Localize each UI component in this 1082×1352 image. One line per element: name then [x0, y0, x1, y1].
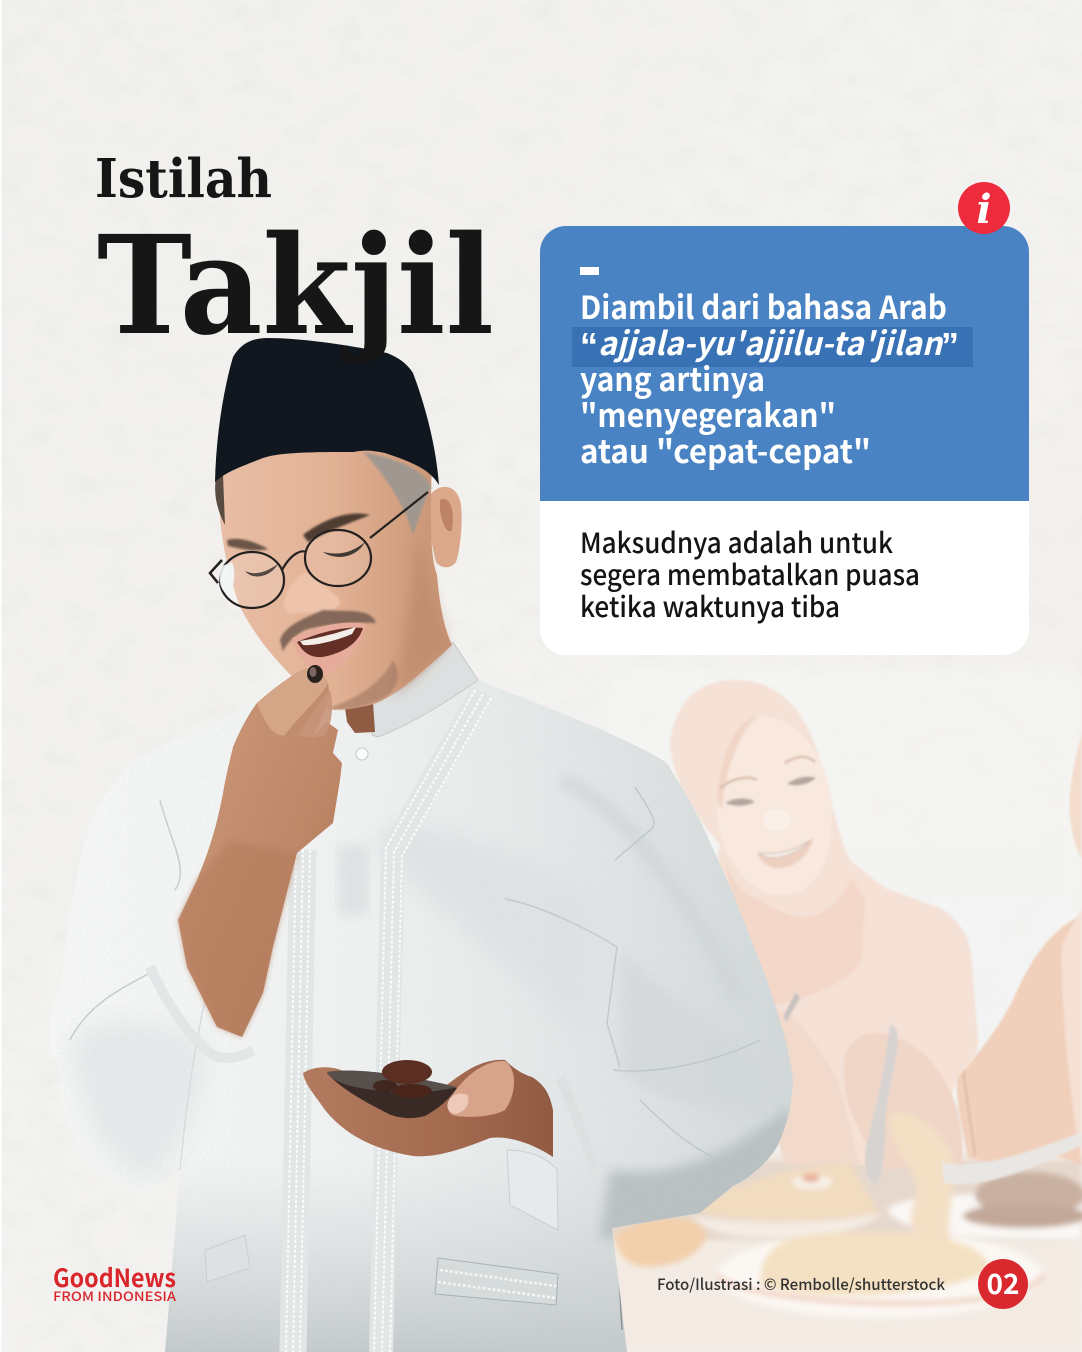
icon: info badge: i	[976, 186, 992, 233]
panel: definition card	[540, 226, 1029, 655]
hair at side	[363, 452, 431, 535]
second person, right edge	[957, 733, 1082, 1165]
title: Takjil: Takjil	[97, 206, 494, 366]
ear	[429, 487, 462, 567]
cuff embroidery right	[560, 1078, 595, 1170]
pockets	[435, 1258, 558, 1305]
inner cuff piece	[507, 1150, 558, 1230]
eyebrows	[227, 539, 268, 550]
definition text: “	[580, 325, 598, 366]
definition text: atau "cepat-cepat"	[580, 427, 871, 473]
hands and utensils	[768, 1010, 860, 1165]
raised hand with date	[178, 665, 342, 1037]
explanation text: Maksudnya adalah untuk	[580, 522, 893, 562]
explanation text	[580, 522, 920, 626]
explanation text: ketika waktunya tiba	[580, 586, 840, 626]
fork	[942, 1132, 1082, 1184]
embroidery bands	[286, 690, 491, 1352]
definition text	[580, 283, 959, 473]
photo credit: Foto/Ilustrasi : © Rembolle/shutterstock	[657, 1273, 945, 1295]
highlight behind Arabic term	[572, 327, 973, 367]
moustache	[280, 610, 376, 652]
logo: GoodNews from Indonesia: FROM INDONESIA	[53, 1286, 177, 1305]
definition text: ajjala-yu'ajjilu-ta'jilan	[598, 319, 944, 365]
table	[600, 1150, 1082, 1352]
mouth	[292, 623, 366, 674]
folds	[70, 787, 760, 1170]
neck shadow	[345, 672, 420, 733]
icon: info badge	[958, 182, 1010, 234]
shirt	[62, 680, 793, 1352]
lower hand with bowl of dates	[303, 1060, 553, 1157]
definition text: ”	[941, 325, 959, 366]
title: Istilah: Istilah	[95, 147, 272, 210]
glasses	[210, 492, 428, 608]
woman	[670, 680, 978, 1185]
explanation text: segera membatalkan puasa	[580, 554, 920, 594]
head	[215, 430, 462, 710]
photo: woman and food in the background	[600, 680, 1082, 1352]
fabric grain	[40, 630, 820, 1352]
card white body	[540, 226, 1029, 655]
lower pocket seam	[618, 1282, 623, 1330]
plates of food	[615, 1112, 1082, 1318]
woman face features	[720, 778, 757, 788]
page number badge	[978, 1259, 1028, 1309]
stubble	[330, 660, 398, 709]
definition text: yang artinya	[580, 355, 765, 401]
nose	[284, 572, 340, 614]
face	[218, 430, 452, 710]
photo: man eating a date	[40, 338, 820, 1352]
collar	[372, 642, 478, 737]
definition text: "menyegerakan"	[580, 391, 836, 437]
sleeve shading	[600, 1105, 790, 1240]
cuff embroidery left	[150, 967, 253, 1058]
button	[356, 748, 368, 760]
logo: GoodNews from Indonesia: GoodNews	[53, 1259, 176, 1295]
eyes	[245, 564, 278, 576]
dash accent	[580, 267, 599, 275]
kopiah cap	[215, 338, 439, 485]
definition text: Diambil dari bahasa Arab	[580, 283, 947, 329]
page number badge: 02	[986, 1263, 1020, 1303]
card blue section	[540, 226, 1029, 501]
